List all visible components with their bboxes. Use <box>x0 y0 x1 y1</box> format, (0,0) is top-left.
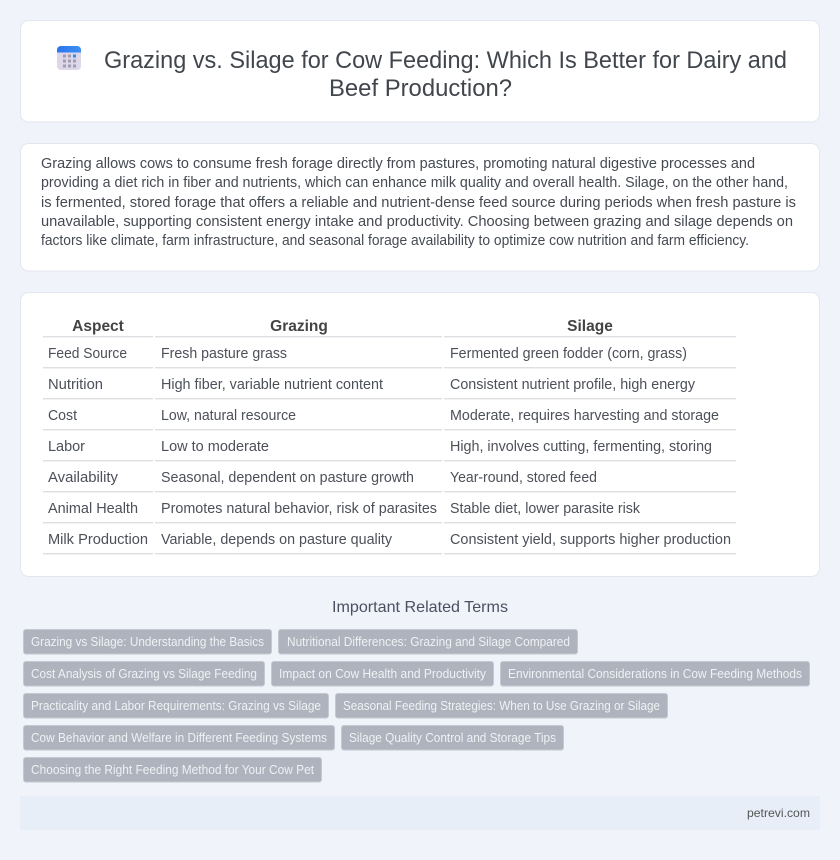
tag <box>342 726 564 750</box>
text block: description: factors like climate, farm infrastructure, and seasonal forage availability to optimize cow nutrition and farm efficiency. <box>41 233 749 249</box>
row: animal health <box>48 501 641 517</box>
tag: Practicality and Labor Requirements: Grazing vs Silage <box>31 699 321 713</box>
row: labor: Labor <box>48 439 85 455</box>
tag: Silage Quality Control and Storage Tips <box>349 731 556 745</box>
table header: Silage <box>567 318 613 335</box>
text block: description: is fermented, stored forage that offers a reliable and nutrient-dense feed source during periods when fresh pasture is <box>41 195 796 211</box>
row: milk production <box>48 532 731 548</box>
panel: header <box>20 20 820 122</box>
row: animal health: Animal Health <box>48 501 138 517</box>
row: feed source: Feed Source <box>48 346 127 362</box>
row: cost <box>48 408 719 424</box>
row: nutrition: Nutrition <box>48 377 103 393</box>
row: cost: Cost <box>48 408 77 424</box>
table header: Aspect <box>72 318 124 335</box>
tag <box>278 630 578 654</box>
row: animal health: Promotes natural behavior, risk of parasites <box>161 501 437 517</box>
icon: calendar <box>57 46 81 70</box>
row: nutrition: Consistent nutrient profile, high energy <box>450 377 696 393</box>
tag <box>24 726 334 750</box>
row: animal health: Stable diet, lower parasite risk <box>450 501 641 517</box>
tag: Choosing the Right Feeding Method for Your Cow Pet <box>31 763 315 777</box>
row: availability: Year-round, stored feed <box>450 470 597 486</box>
tag <box>336 694 668 718</box>
row: nutrition <box>48 377 696 393</box>
footer: petrevi.com <box>747 806 810 820</box>
tag: Grazing vs Silage: Understanding the Basics <box>31 635 264 649</box>
row: feed source <box>48 346 687 362</box>
table header: Grazing <box>270 318 328 335</box>
row: availability: Seasonal, dependent on pasture growth <box>161 470 414 486</box>
tag <box>24 662 264 686</box>
text block: description: Grazing allows cows to consume fresh forage directly from pastures, promoting natural digestive processes and <box>41 156 755 172</box>
row: labor <box>48 439 712 455</box>
tag <box>24 694 328 718</box>
tag: Nutritional Differences: Grazing and Silage Compared <box>287 635 570 649</box>
row: availability <box>48 470 597 486</box>
text block: description: providing a diet rich in fiber and nutrients, which can enhance milk quality and overall health. Silage, on the other hand, <box>41 175 788 191</box>
row: feed source: Fresh pasture grass <box>161 346 287 362</box>
tag list <box>24 630 810 782</box>
tag: Impact on Cow Health and Productivity <box>279 667 487 681</box>
row: feed source: Fermented green fodder (corn, grass) <box>450 346 687 362</box>
title: Beef Production? <box>329 75 512 102</box>
text block: description: unavailable, supporting consistent energy intake and productivity. Choosing between grazing and silage depends on <box>41 214 793 230</box>
heading: important related terms: Important Related Terms <box>332 599 508 616</box>
panel: comparison table <box>20 292 820 576</box>
row: nutrition: High fiber, variable nutrient content <box>161 377 383 393</box>
row: labor: High, involves cutting, fermenting, storing <box>450 439 712 455</box>
tag <box>24 630 272 654</box>
row: labor: Low to moderate <box>161 439 269 455</box>
text block: description <box>41 156 796 249</box>
tag <box>272 662 494 686</box>
row: milk production: Consistent yield, supports higher production <box>450 532 731 548</box>
footer <box>20 796 820 830</box>
tag <box>500 662 810 686</box>
row: milk production: Variable, depends on pasture quality <box>161 532 393 548</box>
title <box>104 47 787 102</box>
table header <box>72 318 613 335</box>
tag <box>24 758 322 782</box>
title: Grazing vs. Silage for Cow Feeding: Which Is Better for Dairy and <box>104 47 787 74</box>
tag: Seasonal Feeding Strategies: When to Use Grazing or Silage <box>343 699 660 713</box>
row: cost: Moderate, requires harvesting and storage <box>450 408 719 424</box>
row: milk production: Milk Production <box>48 532 148 548</box>
panel: description <box>20 144 820 271</box>
tag: Environmental Considerations in Cow Feeding Methods <box>508 667 802 681</box>
row: cost: Low, natural resource <box>161 408 296 424</box>
row: availability: Availability <box>48 470 119 486</box>
tag: Cow Behavior and Welfare in Different Feeding Systems <box>31 731 327 745</box>
tag: Cost Analysis of Grazing vs Silage Feeding <box>31 667 257 681</box>
